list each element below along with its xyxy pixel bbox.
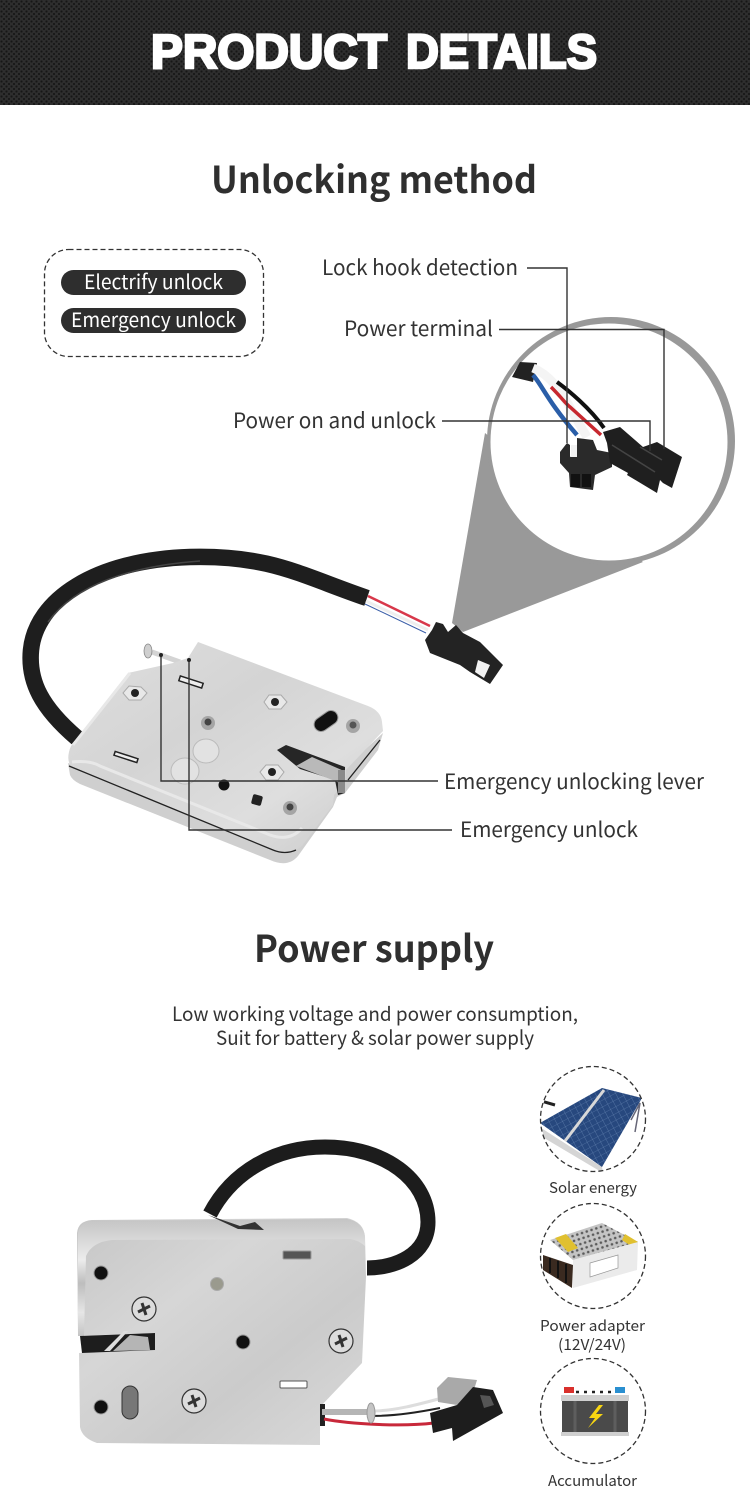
label: lock hook detection: Lock hook detection — [322, 252, 518, 282]
text block: power description: Suit for battery & solar power supply — [216, 1022, 534, 1051]
heading: power supply: Power supply — [254, 919, 494, 973]
source: power adapter — [540, 1204, 646, 1355]
callout lines: connector — [442, 268, 664, 451]
lock top plate — [68, 642, 383, 852]
pin — [144, 644, 180, 662]
magnified connector housings — [560, 427, 682, 493]
callout lines: lock — [159, 653, 452, 830]
holes, rivet and slots — [94, 1251, 311, 1419]
image: solar panel — [534, 1088, 642, 1173]
seam — [69, 740, 380, 852]
text block: power description — [172, 998, 578, 1051]
icon: battery — [561, 1387, 629, 1436]
hex nuts and rivets — [123, 686, 360, 815]
label: emergency unlock: Emergency unlock — [460, 814, 638, 844]
title — [151, 26, 597, 79]
label: power terminal: Power terminal — [344, 313, 493, 343]
source: accumulator — [540, 1358, 646, 1491]
image: adapter — [543, 1223, 638, 1288]
panel: unlock modes — [44, 250, 264, 356]
pill: electrify unlock: Electrify unlock — [84, 266, 223, 295]
label: Solar energy — [549, 1177, 637, 1198]
latch slot — [80, 1333, 155, 1353]
label: Accumulator — [548, 1470, 637, 1491]
top rim — [78, 1219, 365, 1336]
source: solar energy — [534, 1066, 646, 1198]
text block: power description: Low working voltage and power consumption, — [172, 998, 578, 1027]
product image: lock flat view — [77, 1147, 503, 1445]
slots and holes — [114, 676, 341, 806]
screws — [132, 1297, 353, 1413]
heading: unlocking method: Unlocking method — [211, 150, 537, 204]
label: Power adapter — [540, 1315, 645, 1336]
label: power on and unlock: Power on and unlock — [233, 405, 436, 435]
wires — [365, 596, 430, 633]
title: DETAILS — [406, 26, 597, 79]
lock wall — [68, 733, 383, 863]
label: (12V/24V) — [558, 1334, 626, 1355]
latch slot — [277, 745, 345, 795]
title: PRODUCT — [151, 26, 387, 79]
wires and pin — [320, 1398, 442, 1426]
cable — [31, 557, 367, 738]
label — [540, 1315, 645, 1355]
lock body — [77, 1218, 366, 1445]
header banner — [0, 0, 750, 105]
pill: emergency unlock: Emergency unlock — [71, 304, 236, 333]
product image: lock angled view — [31, 557, 503, 863]
magnifier callout — [452, 317, 735, 632]
small connector — [425, 622, 503, 684]
magnified connector wires — [512, 362, 604, 437]
cable — [210, 1147, 428, 1268]
connector — [430, 1377, 503, 1441]
label: emergency unlocking lever: Emergency unlocking lever — [444, 766, 705, 796]
